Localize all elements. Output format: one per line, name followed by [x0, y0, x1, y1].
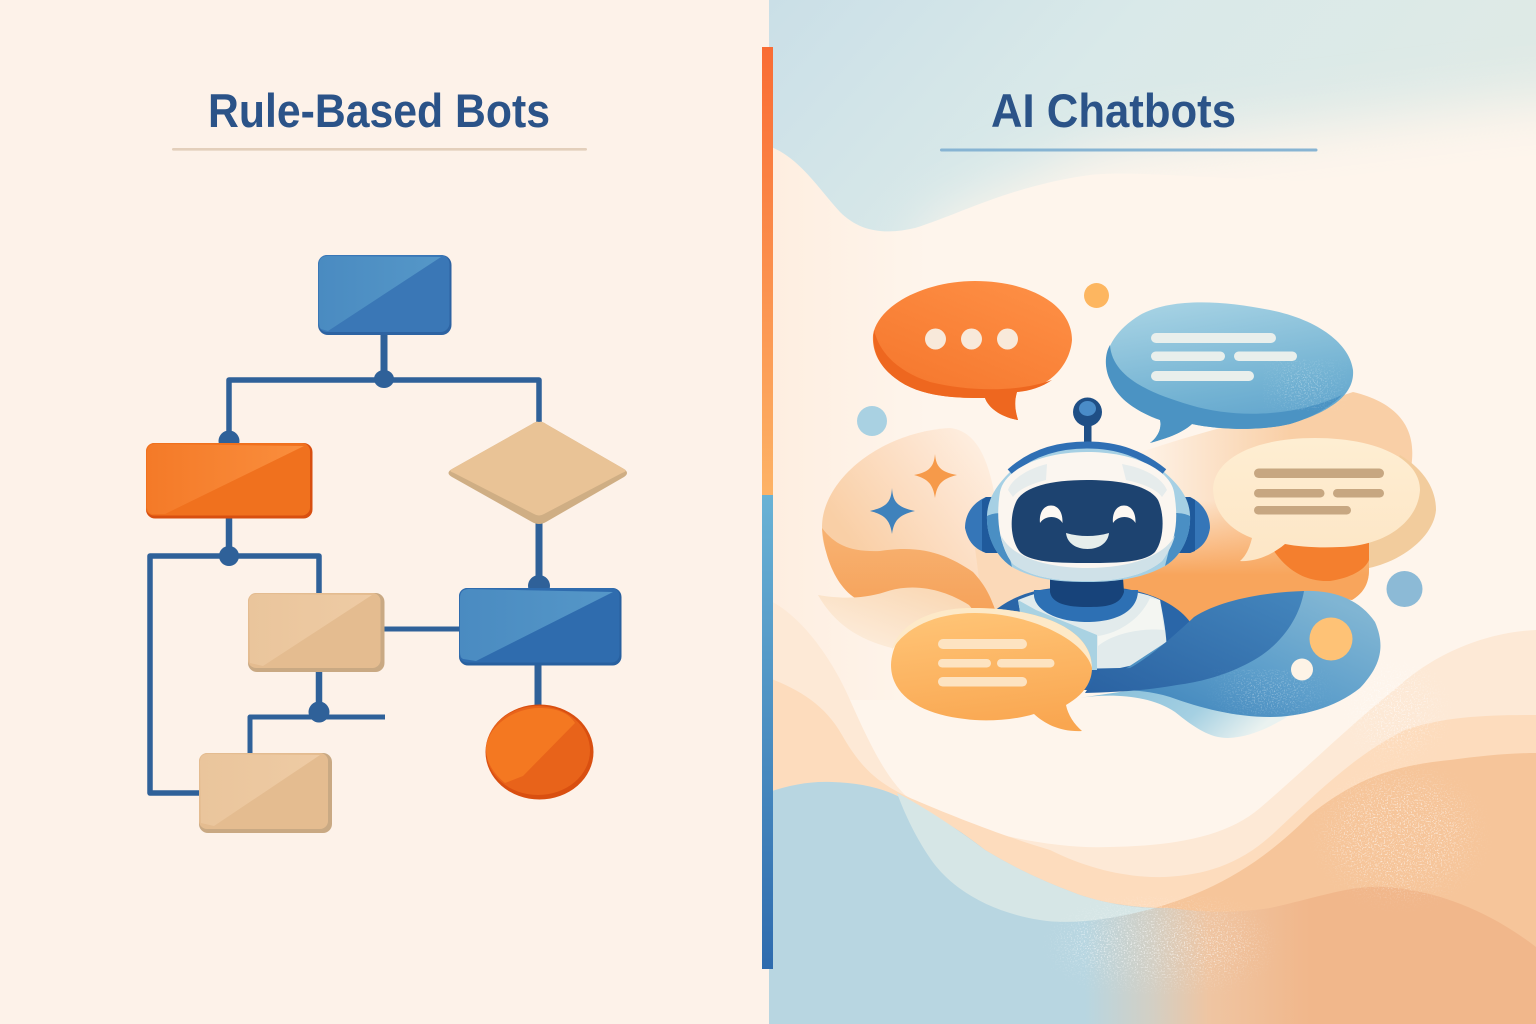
blue wave: light blob	[1090, 591, 1380, 717]
panel: ai chatbots background	[769, 0, 1536, 1024]
speech bubble: orange with dots	[873, 281, 1072, 420]
box: start, blue	[318, 255, 452, 335]
heading underline: right	[940, 148, 1318, 152]
dot: yellow on wave	[1310, 618, 1352, 660]
box: process, blue right	[459, 588, 622, 666]
robot ears	[965, 497, 1210, 553]
texture: speckles on blue wave	[1225, 676, 1315, 708]
robot face screen	[1012, 480, 1163, 563]
robot	[965, 398, 1210, 690]
circle: end, orange	[486, 704, 594, 800]
dot: yellow	[1084, 283, 1109, 308]
robot eye left	[1040, 506, 1063, 523]
blob: peach behind robot	[975, 548, 1100, 625]
heading: Rule-Based Bots: Rule-Based Bots	[208, 84, 550, 137]
box: process, tan lower	[199, 753, 332, 833]
speech bubble: blue with lines	[1106, 302, 1353, 443]
sparkle: orange	[914, 454, 957, 498]
blob: left orange band	[822, 528, 996, 640]
top cream wave	[769, 146, 1536, 700]
sparkle: blue	[870, 488, 915, 534]
robot eye right	[1113, 506, 1136, 523]
speech bubble: yellow-orange with lines	[891, 608, 1092, 731]
blob: bubble tan shadow	[1369, 455, 1436, 568]
blob: deep orange	[1270, 538, 1369, 581]
dot: light blue left	[857, 406, 887, 436]
blob: right peach	[1090, 392, 1412, 600]
diamond: decision, tan	[448, 422, 627, 524]
heading: AI Chatbots: AI Chatbots	[991, 84, 1236, 137]
background waves	[769, 600, 1536, 1024]
blob: left pale wave	[818, 588, 985, 648]
chatbot illustration	[818, 281, 1436, 738]
heading underline: left	[172, 148, 587, 151]
divider bar	[762, 47, 773, 969]
box: process, tan middle	[248, 593, 384, 672]
robot body	[993, 578, 1192, 690]
box: process, orange	[146, 443, 312, 518]
robot helmet	[987, 445, 1190, 582]
dot: cream on wave	[1291, 658, 1313, 680]
robot antenna	[1073, 398, 1102, 448]
texture: speckles on waves	[1060, 670, 1470, 980]
blue wave: lower tail	[1079, 680, 1295, 738]
connector lines	[150, 334, 539, 793]
robot mouth	[1066, 533, 1109, 549]
dot: blue right	[1386, 571, 1422, 607]
connector nodes	[218, 370, 550, 722]
blue wave: dark wing	[1085, 591, 1304, 693]
speech bubble: cream with lines	[1213, 438, 1420, 561]
panel: rule-based bots background	[0, 0, 769, 1024]
flowchart	[146, 255, 627, 833]
blob: right orange	[1090, 495, 1369, 628]
blob: left peach	[822, 428, 1000, 610]
